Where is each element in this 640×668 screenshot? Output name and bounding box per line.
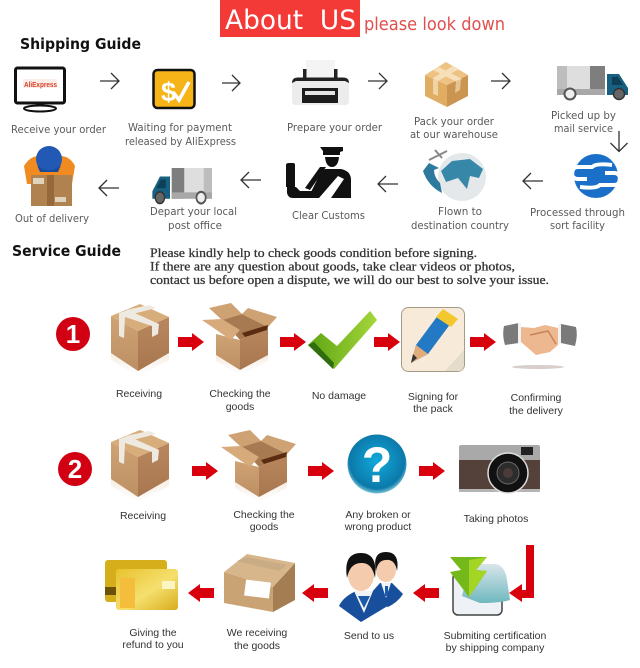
step: any broken or wrong product: Any broken or xyxy=(345,509,411,521)
step: any broken or wrong product: wrong product xyxy=(344,521,411,533)
arrow xyxy=(280,333,306,351)
step: clear customs xyxy=(286,147,365,222)
subtitle: please look down xyxy=(364,14,505,35)
step: any broken or wrong product: ? xyxy=(362,437,392,493)
step: picked up by mail service xyxy=(551,66,628,135)
step: receive your order: AliExpress xyxy=(24,82,57,89)
step: waiting for payment xyxy=(125,70,236,148)
arrow xyxy=(413,584,439,602)
step: depart your local post office: post office xyxy=(168,220,222,232)
step: submitting certification: by shipping company xyxy=(446,642,545,654)
arrow xyxy=(368,73,387,89)
title banner: About US xyxy=(225,5,356,36)
arrow xyxy=(99,180,119,196)
step: out of delivery: Out of delivery xyxy=(15,213,89,225)
arrow xyxy=(192,462,218,480)
step: we receiving the goods: the goods xyxy=(234,640,280,652)
step: signing for the pack: Signing for xyxy=(408,391,459,403)
arrow xyxy=(374,333,400,351)
step: receive your order: Receive your order xyxy=(11,124,107,136)
step: we receiving the goods xyxy=(224,554,295,652)
heading: service guide: Service Guide xyxy=(12,242,121,260)
step: send to us: Send to us xyxy=(344,630,394,642)
step: pack your order: at our warehouse xyxy=(410,129,498,141)
step: confirming the delivery: the delivery xyxy=(509,405,564,417)
step: submitting certification xyxy=(444,557,547,654)
step: waiting for payment: released by AliExpress xyxy=(125,136,236,148)
arrow xyxy=(241,172,261,188)
step: receive your order xyxy=(11,68,107,136)
step: we receiving the goods: We receiving xyxy=(227,627,287,639)
arrow xyxy=(491,73,510,89)
step: signing for the pack xyxy=(402,308,464,415)
service note: Please kindly help to check goods condition before signing. xyxy=(150,245,477,260)
arrow xyxy=(378,176,398,192)
step: processed through sort facility: sort facility xyxy=(550,220,605,232)
step: prepare your order: Prepare your order xyxy=(287,122,383,134)
service note: If there are any question about goods, take clear videos or photos, xyxy=(150,258,515,274)
badge: 1: 1 xyxy=(66,319,80,349)
step: depart your local post office xyxy=(150,168,237,232)
arrow xyxy=(302,584,328,602)
step: checking the goods: Checking the xyxy=(209,388,271,400)
step: no damage: No damage xyxy=(312,390,366,402)
step: checking the goods xyxy=(221,430,296,533)
badge: 2: 2 xyxy=(68,454,82,484)
step: picked up by mail service: mail service xyxy=(554,123,613,135)
step: pack your order xyxy=(410,62,498,141)
step: taking photos xyxy=(459,445,540,525)
step: signing for the pack: the pack xyxy=(413,403,454,415)
step: no damage xyxy=(308,311,377,402)
arrow xyxy=(188,584,214,602)
step: picked up by mail service: Picked up by xyxy=(551,110,616,122)
heading: shipping guide: Shipping Guide xyxy=(20,35,141,53)
step: processed through sort facility: Processed through xyxy=(530,207,625,219)
arrow xyxy=(523,173,543,189)
service note xyxy=(150,245,549,287)
step: taking photos: Taking photos xyxy=(464,513,528,525)
step: confirming the delivery: Confirming xyxy=(511,392,562,404)
badge: 2 xyxy=(58,452,92,486)
step: any broken or wrong product xyxy=(344,434,411,533)
step: confirming the delivery xyxy=(503,323,577,417)
step: clear customs: Clear Customs xyxy=(292,210,365,222)
step: flown to destination country: Flown to xyxy=(438,206,482,218)
arrow xyxy=(178,333,204,351)
step: checking the goods: Checking the xyxy=(233,509,295,521)
arrow xyxy=(222,75,240,91)
step: depart your local post office: Depart your local xyxy=(150,206,237,218)
step: giving the refund xyxy=(105,560,184,651)
arrow: corner xyxy=(509,545,534,602)
step: submitting certification: Submiting certification xyxy=(444,630,547,642)
step: giving the refund: Giving the xyxy=(129,627,177,639)
step: processed through sort facility xyxy=(530,154,625,232)
arrow xyxy=(100,73,119,89)
arrow xyxy=(470,333,496,351)
step: send to us xyxy=(339,552,403,642)
step: waiting for payment: $ xyxy=(161,77,176,107)
arrow xyxy=(419,462,445,480)
step: giving the refund: refund to you xyxy=(122,639,184,651)
step: checking the goods: goods xyxy=(250,521,278,533)
arrow: down xyxy=(610,131,628,152)
step: checking the goods: goods xyxy=(226,401,254,413)
step: flown to destination country xyxy=(411,150,509,232)
step: receiving xyxy=(111,304,169,400)
step: receiving: Receiving xyxy=(120,510,166,522)
step: out of delivery xyxy=(15,146,89,225)
step: waiting for payment: Waiting for payment xyxy=(128,122,232,134)
step: pack your order: Pack your order xyxy=(414,116,495,128)
step: checking the goods xyxy=(202,303,277,413)
arrow xyxy=(308,462,334,480)
step: flown to destination country: destination country xyxy=(411,220,509,232)
step: receiving: Receiving xyxy=(116,388,162,400)
step: prepare your order xyxy=(287,60,383,134)
badge: 1 xyxy=(56,317,90,351)
step: receiving xyxy=(111,430,169,522)
service note: contact us before open a dispute, we will do our best to solve your issue. xyxy=(150,272,549,287)
